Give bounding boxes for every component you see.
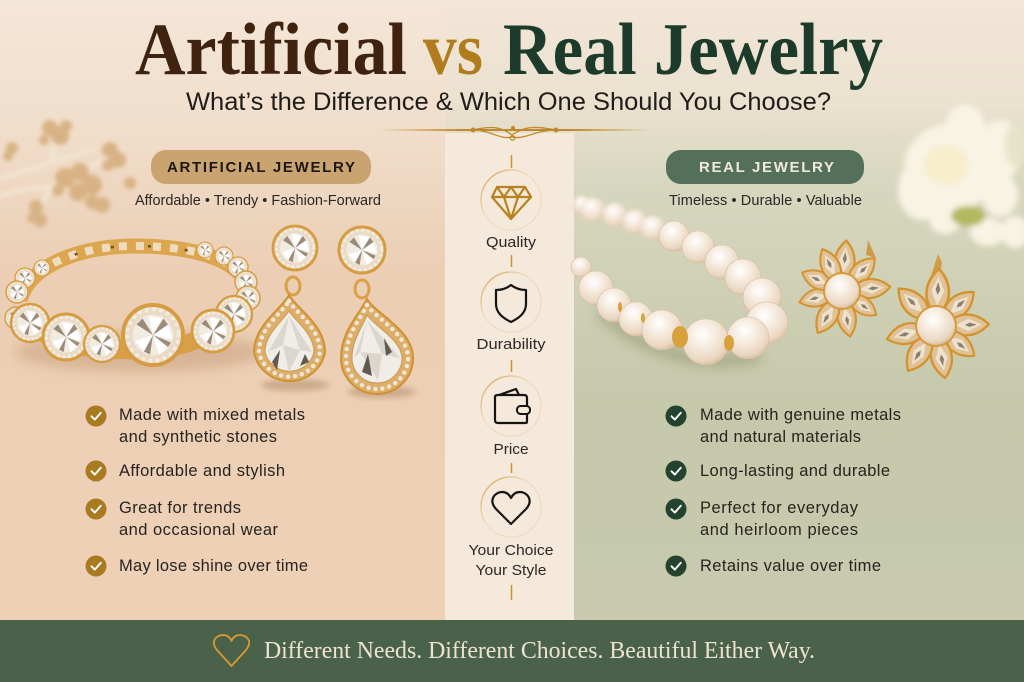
icon: footer heart [214, 635, 249, 666]
icon: quality diamond [481, 170, 541, 230]
right flower stud [885, 254, 989, 380]
point 1 [666, 406, 901, 446]
label: your choice your style [468, 542, 554, 579]
point 1: and natural materials [700, 428, 861, 446]
icon: heart choice [481, 477, 541, 537]
title: Real Jewelry [503, 9, 883, 91]
point 1: Made with genuine metals [700, 406, 901, 424]
ornamental divider [380, 126, 652, 140]
white flower decoration [898, 104, 1024, 248]
background: left peach panel [0, 0, 446, 682]
subtitle: What’s the Difference & Which One Should You Choose? [186, 88, 831, 116]
panel: real jewelry heading [666, 150, 864, 184]
illustration: crystal bracelet [5, 242, 265, 372]
point 3: and occasional wear [119, 521, 278, 539]
right earring [339, 227, 413, 394]
point 1 [86, 406, 305, 446]
left earring [254, 226, 325, 381]
list: real jewelry points [666, 406, 901, 576]
title [135, 9, 883, 91]
panel: artificial jewelry heading: ARTIFICIAL JEWELRY [167, 159, 355, 176]
point 3: Perfect for everyday [700, 499, 859, 517]
point 1: Made with mixed metals [119, 406, 305, 424]
footer slogan: Different Needs. Different Choices. Beautiful Either Way. [264, 638, 815, 664]
point 4: May lose shine over time [119, 557, 308, 575]
center connector ticks [510, 155, 512, 600]
dried flowers decoration [0, 120, 136, 227]
artificial jewelry tagline: Affordable • Trendy • Fashion-Forward [135, 193, 381, 209]
label: quality: Quality [486, 234, 537, 251]
point 3 [666, 498, 859, 539]
panel: real jewelry heading: REAL JEWELRY [699, 159, 834, 176]
point 2: Long-lasting and durable [700, 462, 890, 480]
panel: artificial jewelry heading [151, 150, 371, 184]
point 3 [86, 498, 278, 539]
real jewelry tagline: Timeless • Durable • Valuable [669, 193, 862, 209]
point 2: Affordable and stylish [119, 462, 285, 480]
label: your choice your style: Your Style [476, 562, 546, 579]
point 3: Great for trends [119, 499, 241, 517]
icon: price wallet [481, 376, 541, 436]
background: right sage panel [446, 0, 1024, 682]
left flower stud [797, 240, 891, 338]
title: Artificial [135, 9, 407, 91]
label: your choice your style: Your Choice [468, 542, 554, 559]
label: durability: Durability [476, 336, 546, 353]
center comparison column [445, 133, 574, 620]
footer banner [0, 620, 1024, 682]
point 4: Retains value over time [700, 557, 881, 575]
illustration: pearl necklace [571, 196, 788, 365]
point 3: and heirloom pieces [700, 521, 858, 539]
illustration: crystal drop earrings [254, 226, 416, 398]
icon: durability shield [481, 272, 541, 332]
illustration: flower pearl earrings [797, 240, 989, 380]
label: price: Price [494, 441, 528, 458]
point 1: and synthetic stones [119, 428, 277, 446]
list: artificial jewelry points [86, 406, 308, 576]
title: vs [423, 9, 483, 91]
